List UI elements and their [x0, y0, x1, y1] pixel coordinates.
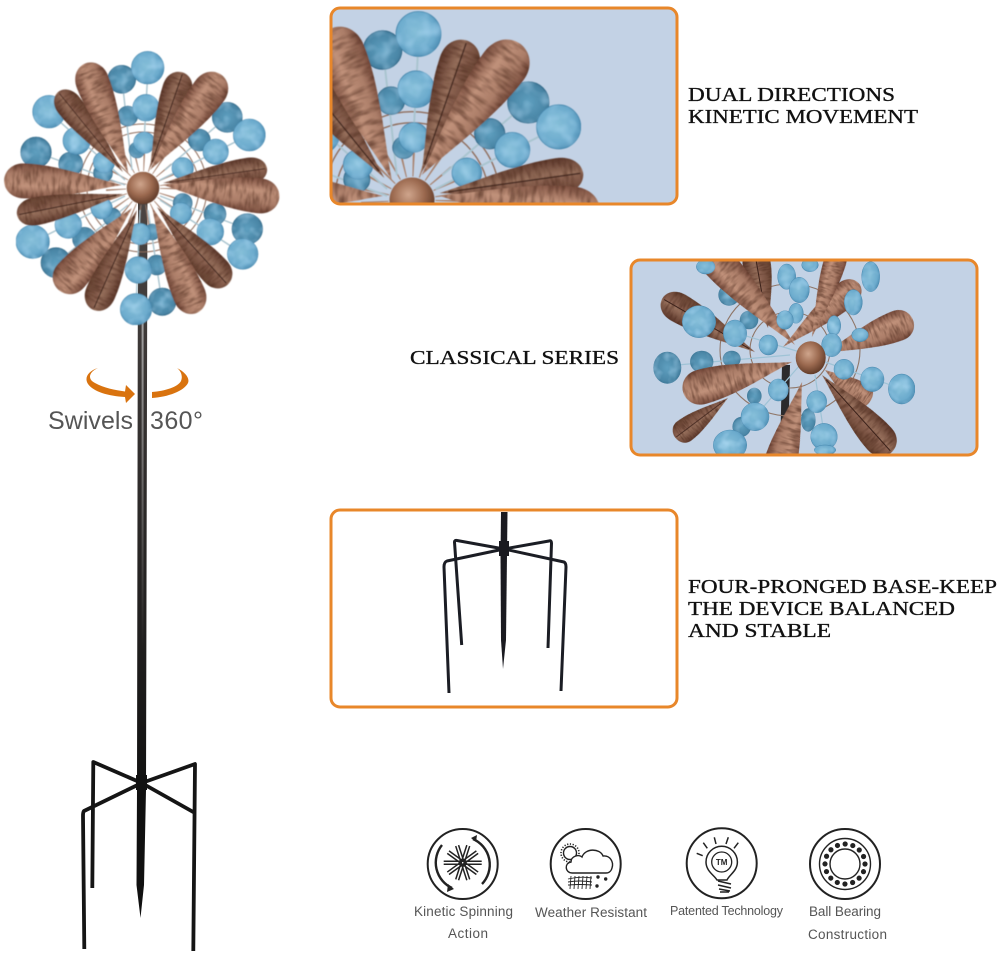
caption: dual directions: KINETIC MOVEMENT — [688, 106, 918, 128]
icon: light bulb with TM: TM — [716, 858, 728, 867]
feature: weather resistant — [535, 829, 647, 920]
text: Swivels 360: Swivels — [48, 407, 133, 435]
label: kinetic spinning action — [414, 904, 513, 941]
text: Swivels 360: 360° — [150, 407, 203, 435]
feature: kinetic spinning action — [414, 829, 513, 941]
caption: dual directions: DUAL DIRECTIONS — [688, 84, 895, 106]
caption: four-pronged base — [688, 576, 997, 642]
stake: main pole and four-pronged base — [83, 190, 195, 951]
caption: four-pronged base: THE DEVICE BALANCED — [688, 598, 955, 620]
label: kinetic spinning action: Action — [448, 926, 488, 941]
feature: ball bearing construction — [808, 829, 887, 942]
text: Swivels 360 — [48, 407, 203, 435]
caption: dual directions — [688, 84, 918, 128]
label: weather resistant: Weather Resistant — [535, 905, 647, 920]
caption: four-pronged base: FOUR-PRONGED BASE-KEEP — [688, 576, 997, 598]
label: ball bearing construction: Construction — [808, 927, 887, 942]
icon: sun, cloud and rain — [551, 829, 621, 899]
icon: spinning star with rotation arrows — [428, 829, 498, 899]
arrow: swivel rotation — [86, 368, 188, 403]
label: ball bearing construction: Ball Bearing — [809, 904, 881, 919]
caption: four-pronged base: AND STABLE — [688, 620, 831, 642]
label: kinetic spinning action: Kinetic Spinning — [414, 904, 513, 919]
label: ball bearing construction — [808, 904, 887, 942]
feature: patented technology — [670, 828, 784, 918]
caption: classical series: CLASSICAL SERIES — [410, 347, 619, 369]
panel: spinner close-up, dual directions — [330, 6, 678, 206]
panel: spinner in perspective, classical series — [630, 258, 978, 456]
panel: four-pronged base close-up — [331, 510, 677, 707]
label: patented technology: Patented Technology — [670, 904, 784, 918]
icon: ball bearing — [810, 829, 880, 899]
main wind spinner head — [3, 51, 281, 325]
